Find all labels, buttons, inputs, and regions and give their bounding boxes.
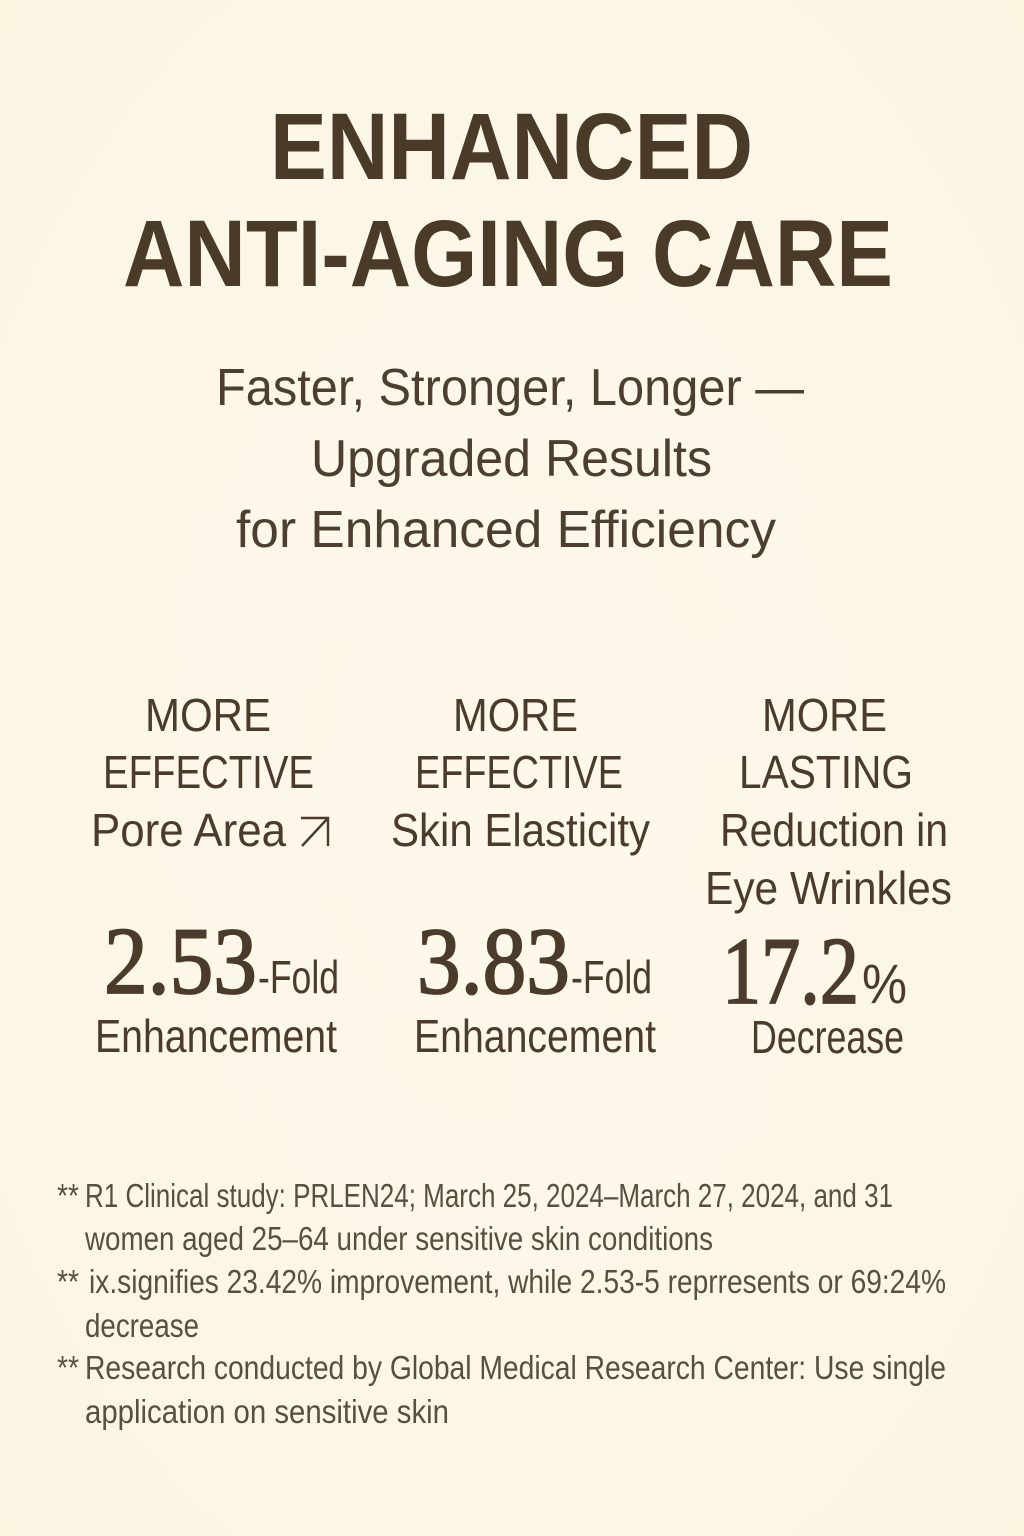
footnote 2: decrease [85, 1307, 199, 1344]
panel: skin elasticity stat [391, 689, 656, 1062]
footnote 3: ** [57, 1349, 79, 1386]
footnote 1: women aged 25–64 under sensitive skin conditions [84, 1220, 713, 1257]
title: ENHANCED [270, 94, 753, 200]
footnote 3 [57, 1349, 946, 1430]
heading: more lasting reduction in eye wrinkles: LASTING [739, 746, 913, 798]
footnote 2: ** [57, 1263, 79, 1300]
heading: more lasting reduction in eye wrinkles [705, 689, 952, 914]
heading: more effective pore area: EFFECTIVE [103, 746, 314, 798]
footnote 3: application on sensitive skin [85, 1393, 449, 1430]
icon: diagonal arrow [301, 818, 328, 846]
heading: more effective skin elasticity: EFFECTIVE [415, 746, 623, 798]
heading: more effective pore area [91, 689, 314, 856]
number: 2.53-fold: 2.53 [104, 908, 257, 1014]
subtitle: Faster, Stronger, Longer — [216, 359, 804, 417]
heading: more lasting reduction in eye wrinkles: MORE [762, 689, 887, 741]
subtitle [216, 359, 804, 559]
number: 2.53-fold: -Fold [258, 951, 339, 1003]
number: 3.83-fold: 3.83 [417, 908, 570, 1014]
number: 3.83-fold: -Fold [571, 951, 652, 1003]
heading: more effective skin elasticity [391, 689, 650, 856]
number: 17.2 percent: % [862, 952, 907, 1015]
heading: more effective skin elasticity: Skin Elasticity [391, 804, 650, 856]
number: 17.2 percent: 17.2 [722, 918, 859, 1024]
heading: more lasting reduction in eye wrinkles: Reduction in [720, 804, 948, 856]
title: ANTI-AGING CARE [123, 201, 893, 307]
heading: more effective skin elasticity: MORE [453, 689, 578, 741]
subtitle: Upgraded Results [311, 430, 712, 488]
label: enhancement: Enhancement [95, 1010, 337, 1062]
panel: pore area stat [91, 689, 339, 1062]
footnote 1: ** [57, 1177, 79, 1214]
heading: more lasting reduction in eye wrinkles: Eye Wrinkles [705, 862, 952, 914]
label: decrease: Decrease [751, 1011, 904, 1063]
panel: eye wrinkles stat [705, 689, 952, 1063]
footnotes [57, 1177, 946, 1430]
label: enhancement: Enhancement [414, 1010, 656, 1062]
heading: more effective pore area: Pore Area [91, 804, 286, 856]
footnote 2 [57, 1263, 946, 1344]
subtitle: for Enhanced Efficiency [236, 501, 776, 559]
title [123, 94, 893, 307]
footnote 1 [57, 1177, 893, 1257]
heading: more effective pore area: MORE [145, 689, 271, 741]
